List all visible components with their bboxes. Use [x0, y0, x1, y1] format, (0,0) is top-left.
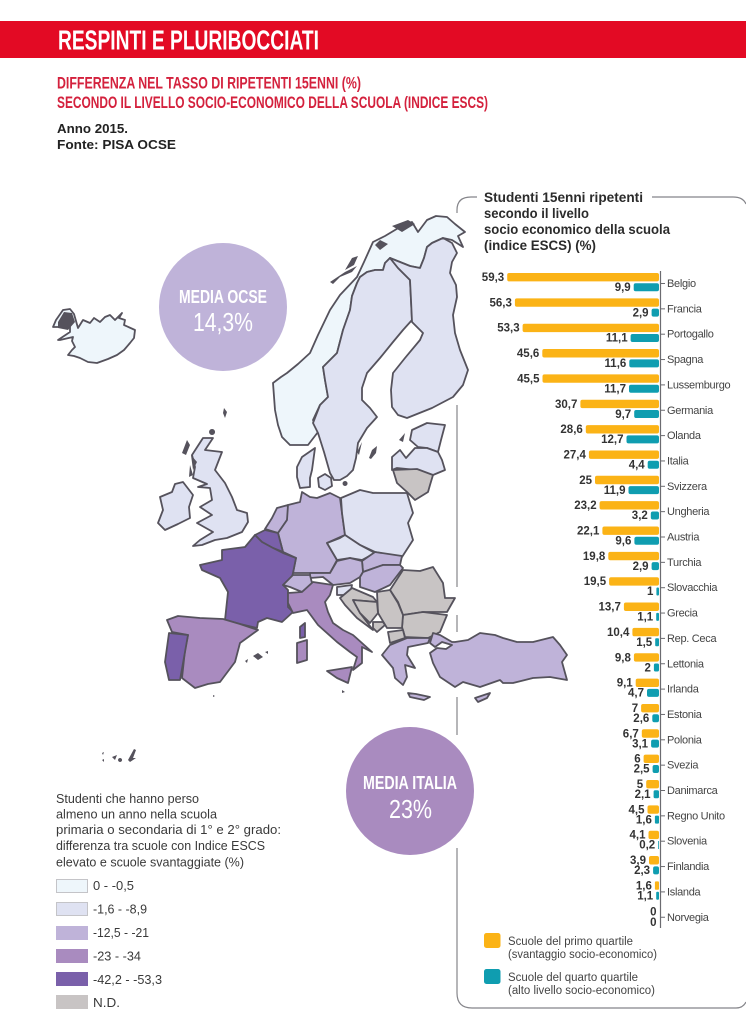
row: Slovacchia: Slovacchia	[667, 582, 718, 594]
Montenegro and Albania	[373, 622, 385, 632]
chart heading: Studenti 15enni ripetenti	[484, 190, 643, 205]
row: Rep. Ceca	[607, 627, 717, 649]
legend heading: Studenti che hanno perso	[56, 792, 199, 806]
row: Olanda: 28,6	[560, 424, 583, 436]
row: Ungheria: 23,2	[574, 500, 597, 512]
row: Slovacchia	[584, 576, 718, 598]
panel outline: bar chart frame	[457, 197, 746, 1008]
row: Spagna: 45,6	[517, 348, 539, 360]
row: Portogallo: Portogallo	[667, 329, 714, 341]
Iceland west fjords detail	[58, 312, 75, 330]
row: Lussemburgo: Lussemburgo	[667, 379, 731, 391]
row: Germania: 9,7	[615, 409, 631, 421]
row: Austria	[577, 526, 700, 548]
Great Britain	[192, 438, 248, 546]
Italy	[288, 582, 372, 670]
circle: OECD average: 14,3%	[193, 307, 253, 337]
row: Finlandia: 2,3	[634, 865, 650, 877]
row: Svezia	[634, 754, 699, 776]
row: Finlandia: Finlandia	[667, 861, 710, 873]
row: Norvegia: 0	[650, 917, 656, 929]
row: Svizzera: 25	[579, 475, 593, 487]
row: Estonia	[632, 703, 703, 725]
row: Regno Unito	[628, 804, 725, 826]
row: Polonia	[623, 728, 703, 750]
legend item: -1,6 - -8,9	[56, 902, 147, 916]
row: Irlanda: 4,7	[628, 688, 644, 700]
legend item: N.D.: N.D.	[93, 996, 120, 1010]
row: Regno Unito: Regno Unito	[667, 810, 725, 822]
Sardinia	[297, 640, 307, 663]
Baltic islands	[343, 433, 405, 486]
row: Grecia	[599, 602, 699, 624]
row: Danimarca: 5	[637, 779, 644, 791]
row: Irlanda: Irlanda	[667, 684, 700, 696]
row: Olanda: Olanda	[667, 430, 702, 442]
Lofoten and Arctic coast islands	[330, 220, 415, 284]
row: Austria: 22,1	[577, 526, 600, 538]
row: Slovacchia: 1	[647, 586, 654, 598]
legend: fourth quartile: Scuole del quarto quartile	[508, 972, 638, 984]
legend item: -23 - -34	[56, 949, 141, 964]
legend heading: almeno un anno nella scuola	[56, 808, 217, 822]
Norway	[273, 216, 465, 445]
row: Svizzera	[579, 475, 708, 497]
row: Slovenia: 0,2	[639, 840, 655, 852]
row: Ungheria: Ungheria	[667, 506, 710, 518]
row: Norvegia	[650, 906, 710, 929]
legend: first quartile	[484, 933, 657, 961]
Czech Republic	[327, 535, 375, 560]
Balearic islands	[213, 651, 345, 697]
Hungary	[360, 565, 403, 592]
Sweden	[313, 258, 412, 480]
row: Svezia: 2,5	[634, 764, 650, 776]
Germany	[278, 492, 345, 573]
Austria	[310, 558, 363, 585]
row: Turchia: 19,8	[583, 551, 606, 563]
chart heading: (indice ESCS) (%)	[484, 238, 596, 253]
row: Belgio: Belgio	[667, 278, 696, 290]
legend item: -42,2 - -53,3	[56, 972, 162, 987]
row: Italia: Italia	[667, 455, 690, 467]
Crete, Cyprus and Aegean islands	[408, 693, 490, 702]
row: Grecia: 1,1	[637, 612, 654, 624]
row: Islanda: 1,6	[636, 880, 652, 892]
row: Germania: 30,7	[555, 399, 577, 411]
Portugal	[165, 633, 188, 680]
Ireland	[158, 482, 193, 530]
row: Germania: Germania	[667, 405, 714, 417]
legend item: 0 - -0,5	[56, 879, 134, 893]
source note	[57, 122, 176, 152]
Latvia	[392, 448, 445, 475]
row: Belgio	[482, 272, 696, 294]
chart heading	[484, 190, 670, 253]
chart legend	[484, 933, 657, 997]
row: Rep. Ceca: 10,4	[607, 627, 630, 639]
row: Belgio: 9,9	[615, 282, 631, 294]
row: Slovenia: Slovenia	[667, 836, 708, 848]
Slovenia	[337, 585, 352, 595]
circle: OECD average	[159, 243, 287, 371]
Bosnia	[353, 600, 378, 623]
legend item: -12,5 - -21	[56, 926, 149, 940]
source note: Anno 2015.	[57, 122, 128, 136]
row: Turchia: Turchia	[667, 557, 702, 569]
legend heading: primaria o secondaria di 1° e 2° grado:	[56, 823, 281, 837]
row: Lettonia: Lettonia	[667, 658, 705, 670]
row: Belgio: 59,3	[482, 272, 504, 284]
chart axis	[660, 271, 662, 928]
row: Rep. Ceca: 1,5	[636, 637, 653, 649]
row: Regno Unito: 1,6	[636, 814, 652, 826]
Lithuania	[393, 469, 433, 500]
subtitle: DIFFERENZA NEL TASSO DI RIPETENTI 15ENNI (%)	[57, 74, 361, 92]
row: Italia: 27,4	[564, 449, 586, 461]
Iceland	[53, 309, 135, 363]
legend item: -1,6 - -8,9: -1,6 - -8,9	[93, 902, 147, 916]
row: Lussemburgo: 11,7	[604, 383, 626, 395]
row: Italia: 4,4	[629, 459, 645, 471]
row: Portogallo: 11,1	[606, 333, 628, 345]
legend item: -12,5 - -21: -12,5 - -21	[93, 926, 149, 940]
row: Olanda: 12,7	[601, 434, 624, 446]
Greece	[382, 638, 430, 685]
map of Europe	[53, 216, 567, 762]
Finland	[390, 238, 468, 418]
row: Francia: Francia	[667, 303, 703, 315]
legend item: 0 - -0,5: 0 - -0,5	[93, 879, 134, 893]
row: Portogallo	[497, 323, 714, 345]
Sicily	[327, 667, 352, 683]
row: Svezia: 6	[634, 754, 641, 766]
Turkey	[430, 633, 567, 687]
row: Svezia: Svezia	[667, 760, 699, 772]
Slovakia	[362, 552, 402, 572]
row: Regno Unito: 4,5	[628, 804, 645, 816]
France	[200, 535, 296, 628]
row: Danimarca: Danimarca	[667, 785, 719, 797]
legend: first quartile: (svantaggio socio-economico)	[508, 949, 657, 961]
row: Slovacchia: 19,5	[584, 576, 607, 588]
Hebrides and Orkney	[182, 408, 227, 477]
Corsica	[300, 623, 305, 638]
Macedonia	[388, 630, 405, 643]
circle: Italy average	[346, 727, 474, 855]
chart heading: secondo il livello	[484, 206, 589, 221]
row: Polonia: 3,1	[632, 738, 649, 750]
Estonia	[410, 423, 445, 452]
legend heading: differenza tra scuole con Indice ESCS	[56, 839, 265, 853]
row: Finlandia	[630, 855, 710, 877]
row: Lettonia	[615, 652, 705, 674]
row: Irlanda	[617, 678, 700, 700]
row: Lettonia: 2	[644, 662, 651, 674]
row: Svizzera: 11,9	[604, 485, 626, 497]
row: Estonia: 2,6	[633, 713, 649, 725]
subtitle	[57, 74, 488, 112]
circle: Italy average: 23%	[389, 794, 432, 824]
row: Austria: Austria	[667, 532, 700, 544]
title banner: RESPINTI E PLURIBOCCIATI	[58, 24, 319, 56]
row: Francia: 56,3	[490, 297, 512, 309]
bar chart	[482, 271, 731, 929]
row: Spagna	[517, 348, 704, 370]
row: Estonia: Estonia	[667, 709, 703, 721]
legend: first quartile: Scuole del primo quartile	[508, 936, 633, 948]
row: Olanda	[560, 424, 702, 446]
Romania	[390, 567, 455, 615]
row: Islanda	[636, 880, 702, 902]
row: Irlanda: 9,1	[617, 678, 633, 690]
Denmark	[297, 448, 315, 488]
row: Lussemburgo	[517, 373, 731, 395]
row: Grecia: Grecia	[667, 608, 699, 620]
row: Grecia: 13,7	[599, 602, 621, 614]
Croatia	[340, 588, 377, 630]
subtitle: SECONDO IL LIVELLO SOCIO-ECONOMICO DELLA SCUOLA (INDICE ESCS)	[57, 94, 488, 112]
row: Estonia: 7	[632, 703, 638, 715]
row: Austria: 9,6	[615, 536, 631, 548]
Danish islands	[318, 474, 332, 490]
chart heading: socio economico della scuola	[484, 222, 670, 237]
Spain	[167, 616, 258, 688]
row: Francia	[490, 297, 703, 319]
row: Portogallo: 53,3	[497, 323, 520, 335]
row: Slovenia	[630, 830, 708, 852]
legend item: -23 - -34: -23 - -34	[93, 950, 141, 964]
Bulgaria	[402, 612, 447, 638]
row: Spagna: 11,6	[605, 358, 626, 370]
legend heading: elevato e scuole svantaggiate (%)	[56, 856, 244, 870]
legend: fourth quartile	[484, 969, 655, 997]
row: Lettonia: 9,8	[615, 652, 631, 664]
row: Turchia	[583, 551, 702, 573]
row: Danimarca	[635, 779, 719, 801]
row: Islanda: 1,1	[637, 890, 654, 902]
Belgium	[255, 530, 283, 552]
row: Turchia: 2,9	[633, 561, 649, 573]
row: Islanda: Islanda	[667, 886, 702, 898]
row: Norvegia: Norvegia	[667, 912, 710, 924]
row: Germania	[555, 399, 714, 421]
row: Norvegia: 0	[650, 906, 656, 918]
row: Francia: 2,9	[633, 307, 649, 319]
row: Polonia: Polonia	[667, 734, 703, 746]
Switzerland	[283, 575, 312, 592]
Netherlands	[265, 505, 290, 533]
row: Spagna: Spagna	[667, 354, 704, 366]
source note: Fonte: PISA OCSE	[57, 138, 176, 152]
row: Ungheria	[574, 500, 710, 522]
row: Danimarca: 2,1	[635, 789, 651, 801]
row: Lussemburgo: 45,5	[517, 373, 540, 385]
map legend	[56, 792, 281, 1010]
legend item: -42,2 - -53,3: -42,2 - -53,3	[93, 973, 162, 987]
Canary Islands	[102, 749, 136, 762]
row: Svizzera: Svizzera	[667, 481, 708, 493]
row: Italia	[564, 449, 690, 471]
circle: OECD average: MEDIA OCSE	[179, 286, 267, 307]
row: Polonia: 6,7	[623, 728, 639, 740]
row: Rep. Ceca: Rep. Ceca	[667, 633, 717, 645]
circle: Italy average: MEDIA ITALIA	[363, 772, 457, 793]
legend heading	[56, 792, 281, 870]
row: Slovenia: 4,1	[630, 830, 646, 842]
row: Finlandia: 3,9	[630, 855, 646, 867]
title banner	[0, 21, 746, 58]
legend item: N.D.	[56, 995, 120, 1010]
Serbia	[377, 590, 403, 628]
legend: fourth quartile: (alto livello socio-economico)	[508, 985, 655, 997]
row: Ungheria: 3,2	[632, 510, 648, 522]
Poland	[341, 490, 413, 557]
